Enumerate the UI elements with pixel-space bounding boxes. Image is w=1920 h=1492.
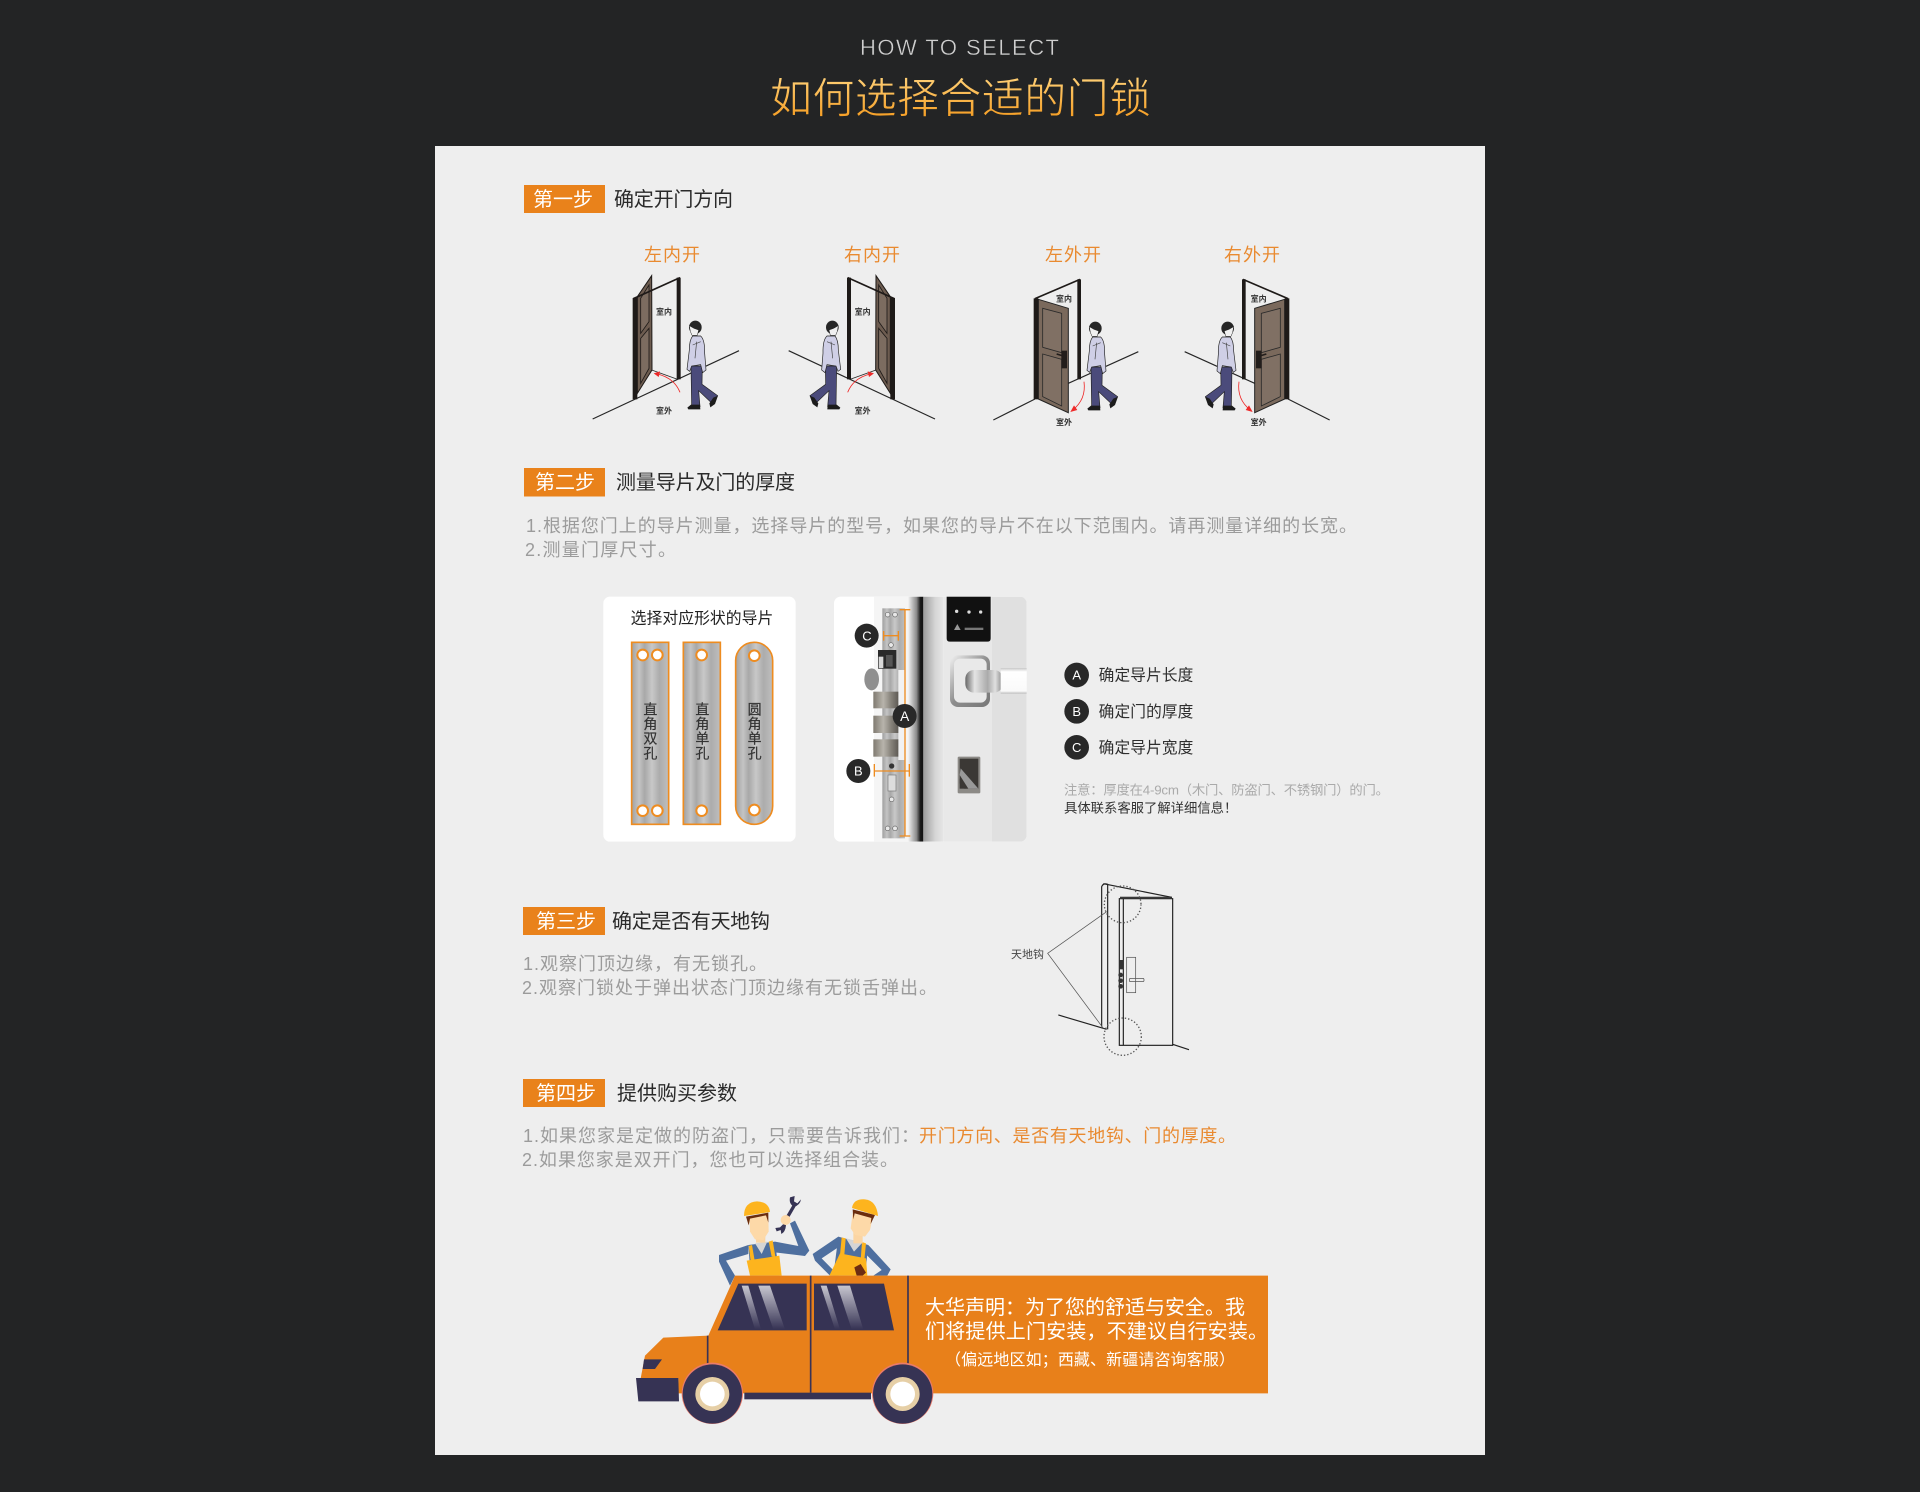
- disclaimer text: [925, 1296, 1268, 1369]
- infographic canvas: [435, 40, 1485, 1455]
- door: right outward: 室外: [1251, 417, 1267, 427]
- plate: right angle single hole: 角: [695, 716, 709, 732]
- step 2 instructions: 2.测量门厚尺寸。: [525, 540, 676, 560]
- plate: right angle single hole: 单: [695, 731, 709, 747]
- disclaimer text: （偏远地区如；西藏、新疆请咨询客服）: [945, 1351, 1235, 1369]
- worker with hammer: [813, 1199, 891, 1276]
- legend C: C: [1072, 740, 1081, 755]
- marker C: C: [862, 628, 872, 643]
- english subtitle: HOW TO SELECT: [860, 35, 1059, 60]
- step 4 instructions: [522, 1126, 1236, 1170]
- panel: step 1 door direction: [524, 185, 1330, 427]
- step 3 badge: 第三步: [536, 910, 596, 933]
- plate: right angle double hole: [632, 642, 669, 824]
- door: left outward: 室外: [1056, 417, 1072, 427]
- plate: rounded single hole: 孔: [748, 745, 762, 761]
- marker A: [893, 704, 917, 728]
- plate: rounded single hole: 单: [748, 731, 762, 747]
- truck: [636, 1276, 1268, 1424]
- legend A: 确定导片长度: [1099, 667, 1194, 685]
- step 4 badge: [523, 1079, 605, 1107]
- step 4 instructions: 2.如果您家是双开门，您也可以选择组合装。: [522, 1150, 898, 1170]
- door: right inward: 室外: [855, 406, 871, 416]
- plate: right angle double hole: 双: [643, 731, 657, 747]
- marker A: A: [900, 709, 910, 724]
- step 3 heading: 确定是否有天地钩: [612, 910, 770, 933]
- door: left outward: 室内: [1056, 293, 1072, 303]
- legend C: [1064, 735, 1194, 760]
- legend C: 确定导片宽度: [1099, 739, 1194, 757]
- step 2 badge: [524, 468, 605, 496]
- marker C: [855, 624, 879, 648]
- step 3 badge: [523, 907, 605, 935]
- panel: step 2 measure: [524, 468, 1389, 842]
- panel: step 4 parameters: [522, 1079, 1268, 1424]
- header: [770, 35, 1151, 122]
- card: plate shapes: 选择对应形状的导片: [631, 608, 773, 627]
- note: 具体联系客服了解详细信息！: [1064, 800, 1237, 816]
- step 1 badge: 第一步: [533, 188, 593, 211]
- door: left inward: [593, 245, 739, 419]
- door: right inward: 室内: [855, 307, 871, 317]
- step 2 badge: 第二步: [535, 471, 595, 494]
- door: left inward: 左内开: [644, 245, 700, 265]
- door: left inward: 室内: [656, 307, 672, 317]
- plate: right angle double hole: 孔: [643, 745, 657, 761]
- step 2 heading: 测量导片及门的厚度: [616, 471, 795, 494]
- step 2 instructions: 1.根据您门上的导片测量，选择导片的型号，如果您的导片不在以下范围内。请再测量详细的长宽。: [526, 516, 1357, 536]
- legend B: [1064, 699, 1194, 724]
- legend A: [1064, 663, 1194, 687]
- marker B: [846, 759, 870, 783]
- step 2 instructions: [525, 516, 1357, 560]
- step 3 instructions: [522, 954, 937, 998]
- marker B: B: [854, 764, 863, 779]
- step 4 instructions: 开门方向、是否有天地钩、门的厚度。: [919, 1126, 1236, 1146]
- door: right outward: [1185, 245, 1330, 427]
- step 4 heading: 提供购买参数: [617, 1082, 737, 1105]
- installation truck with workers: [636, 1196, 1268, 1424]
- step 1 heading: 确定开门方向: [614, 188, 733, 211]
- note: [1064, 781, 1389, 816]
- plate: right angle double hole: 直: [643, 701, 657, 717]
- door: left outward: 左外开: [1045, 245, 1101, 265]
- content panel: [435, 146, 1485, 1455]
- step 1 badge: [524, 185, 605, 213]
- note: 注意：厚度在4-9cm（木门、防盗门、不锈钢门）的门。: [1064, 781, 1389, 797]
- plate: right angle single hole: 直: [695, 701, 709, 717]
- door: right outward: 室内: [1251, 293, 1267, 303]
- step 3 instructions: 1.观察门顶边缘，有无锁孔。: [523, 954, 767, 974]
- disclaimer text: 们将提供上门安装，不建议自行安装。: [925, 1320, 1268, 1343]
- card: lock photo diagram: [834, 597, 1027, 842]
- legend B: B: [1072, 704, 1081, 719]
- plate: right angle single hole: [683, 642, 720, 824]
- door: right outward: 右外开: [1224, 245, 1280, 265]
- door: right inward: 右内开: [844, 245, 900, 265]
- panel: step 3 hook: [522, 884, 1189, 1055]
- plate: rounded single hole: 圆: [748, 701, 762, 717]
- step 3 instructions: 2.观察门锁处于弹出状态门顶边缘有无锁舌弹出。: [522, 978, 937, 998]
- legend B: 确定门的厚度: [1099, 703, 1194, 721]
- door: left inward: 室外: [656, 406, 672, 416]
- step 4 instructions: 1.如果您家是定做的防盗门，只需要告诉我们：: [523, 1126, 919, 1146]
- hook door diagram: 天地钩: [1011, 947, 1044, 961]
- card: plate shapes: [603, 597, 796, 842]
- door: left outward: [993, 245, 1138, 427]
- door: right inward: [789, 245, 935, 419]
- step 4 badge: 第四步: [536, 1082, 596, 1105]
- hook door diagram: [1011, 884, 1189, 1055]
- plate: rounded single hole: [736, 642, 773, 824]
- legend A: A: [1072, 668, 1081, 683]
- plate: rounded single hole: 角: [748, 716, 762, 732]
- plate: right angle single hole: 孔: [695, 745, 709, 761]
- main title: 如何选择合适的门锁: [770, 75, 1151, 122]
- disclaimer text: 大华声明：为了您的舒适与安全。我: [925, 1296, 1245, 1319]
- worker with wrench: [719, 1196, 809, 1286]
- plate: right angle double hole: 角: [643, 716, 657, 732]
